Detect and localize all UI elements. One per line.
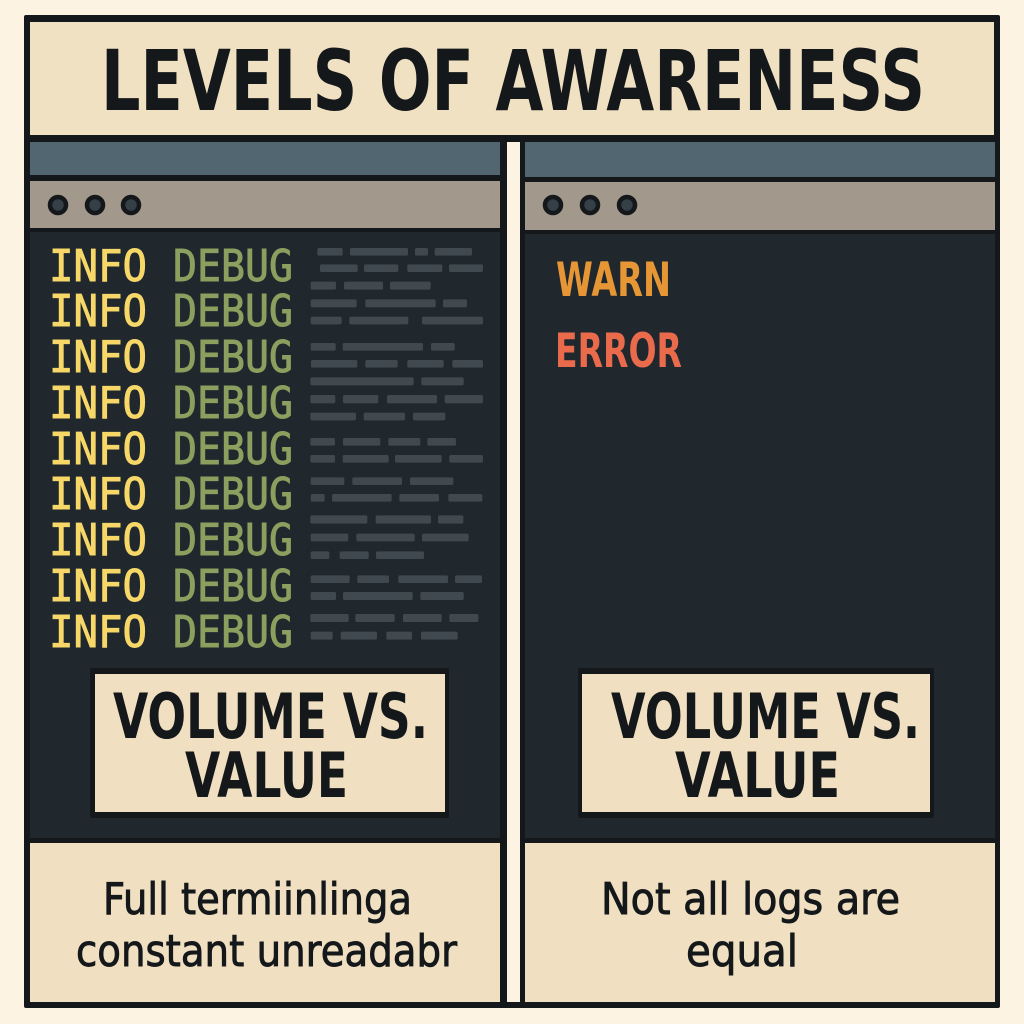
left terminal body xyxy=(30,232,500,838)
WARN label: WARN xyxy=(556,253,671,308)
right window title bar xyxy=(525,142,995,177)
left callout: volume vs. value xyxy=(90,668,449,818)
INFO log labels: INFO xyxy=(49,241,147,292)
INFO log labels: INFO xyxy=(49,607,147,658)
INFO log labels: INFO xyxy=(49,332,147,383)
INFO log labels: INFO xyxy=(49,424,147,475)
panel: left terminal xyxy=(30,142,500,1002)
right caption: equal xyxy=(686,926,798,977)
DEBUG log labels: DEBUG xyxy=(173,286,293,337)
DEBUG log labels: DEBUG xyxy=(173,607,293,658)
title panel xyxy=(30,22,994,135)
DEBUG log labels: DEBUG xyxy=(173,424,293,475)
INFO log labels: INFO xyxy=(49,286,147,337)
DEBUG log labels: DEBUG xyxy=(173,469,293,520)
DEBUG log labels xyxy=(173,241,293,658)
right callout: volume vs. value xyxy=(578,668,934,818)
DEBUG log labels: DEBUG xyxy=(173,378,293,429)
DEBUG log labels: DEBUG xyxy=(173,515,293,566)
DEBUG log labels: DEBUG xyxy=(173,241,293,292)
right terminal body xyxy=(525,234,995,838)
panel: right terminal xyxy=(525,142,995,1002)
right caption: Not all logs are xyxy=(601,874,900,925)
right window toolbar xyxy=(525,182,995,230)
DEBUG log labels: DEBUG xyxy=(173,561,293,612)
right window control dots xyxy=(545,197,635,213)
INFO log labels: INFO xyxy=(49,378,147,429)
ERROR label: ERROR xyxy=(555,324,682,379)
INFO log labels: INFO xyxy=(49,561,147,612)
left callout: volume vs. value: VOLUME VS. xyxy=(113,680,428,753)
right caption xyxy=(525,843,995,1002)
center divider xyxy=(507,142,520,1002)
right callout: volume vs. value: VALUE xyxy=(675,739,840,812)
left caption xyxy=(30,843,500,1002)
DEBUG log labels: DEBUG xyxy=(173,332,293,383)
left window control dots xyxy=(50,197,139,213)
left caption: constant unreadabr xyxy=(76,926,458,977)
INFO log labels xyxy=(49,241,147,658)
left caption: Full termiinlinga xyxy=(103,874,412,925)
blurred log message lines xyxy=(310,248,483,640)
left window toolbar xyxy=(30,181,500,228)
INFO log labels: INFO xyxy=(49,515,147,566)
left window title bar xyxy=(30,142,500,175)
INFO log labels: INFO xyxy=(49,469,147,520)
left callout: volume vs. value: VALUE xyxy=(185,739,348,812)
